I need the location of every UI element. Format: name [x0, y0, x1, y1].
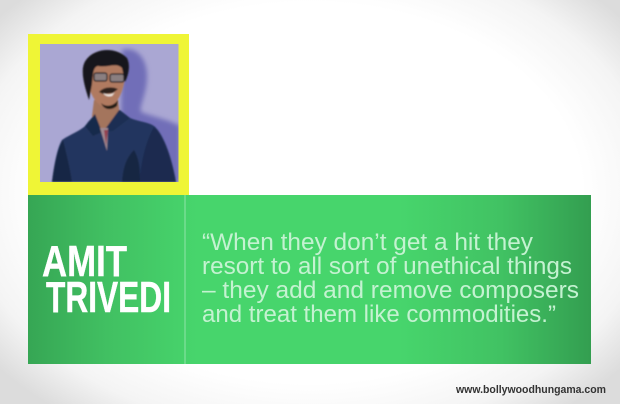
website credit: www.bollywoodhungama.com	[455, 384, 606, 396]
quote text: “When they don’t get a hit they	[202, 229, 533, 256]
quote text: resort to all sort of unethical things	[202, 253, 572, 280]
quote text: and treat them like commodities.”	[202, 301, 556, 328]
name heading: TRIVEDI	[46, 273, 171, 322]
divider	[184, 195, 186, 364]
portrait photo	[40, 44, 180, 182]
quote text: – they add and remove composers	[202, 277, 579, 304]
quote text	[202, 229, 579, 328]
green quote panel	[28, 195, 591, 364]
name heading: AMIT	[42, 237, 127, 286]
name heading	[42, 237, 171, 322]
yellow photo frame	[28, 34, 189, 195]
